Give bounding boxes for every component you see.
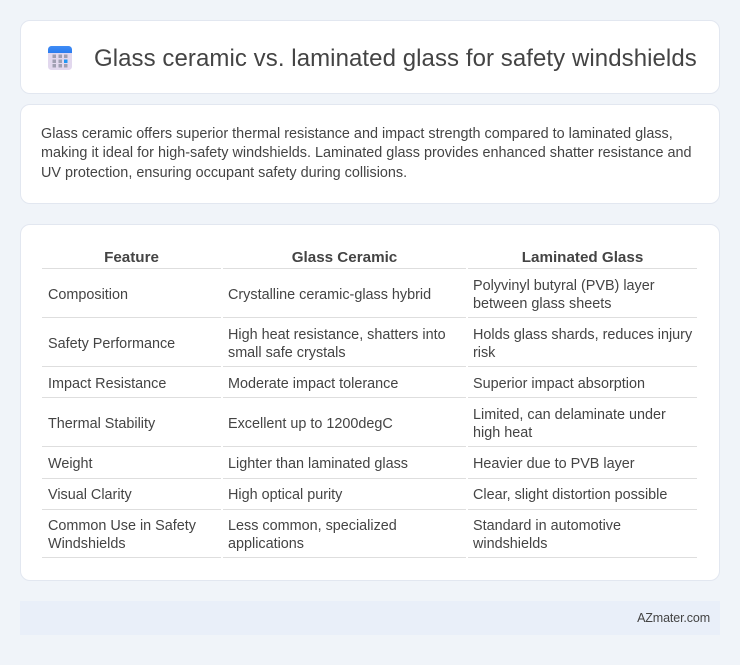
row: impact resistance: Moderate impact tolerance xyxy=(228,376,398,392)
summary text: UV protection, ensuring occupant safety during collisions. xyxy=(41,165,407,181)
row: safety performance: High heat resistance, shatters into xyxy=(228,327,446,343)
row: composition: Crystalline ceramic-glass hybrid xyxy=(228,287,431,303)
column headers: Glass Ceramic xyxy=(292,249,397,266)
summary text: making it ideal for high-safety windshields. Laminated glass provides enhanced shatter resistance and xyxy=(41,145,692,161)
column headers: Laminated Glass xyxy=(522,249,643,266)
title: Glass ceramic vs. laminated glass for safety windshields xyxy=(94,45,697,72)
column headers xyxy=(104,249,643,266)
footer bar xyxy=(20,601,720,635)
row: weight: Heavier due to PVB layer xyxy=(473,456,635,472)
row: common use: applications xyxy=(228,536,304,552)
panel: comparison table xyxy=(20,224,720,581)
row: safety performance xyxy=(48,327,692,361)
row: composition: between glass sheets xyxy=(473,296,611,312)
row: composition: Composition xyxy=(48,287,128,303)
row: thermal stability: Thermal Stability xyxy=(48,416,155,432)
summary text: Glass ceramic offers superior thermal resistance and impact strength compared to laminated glass, xyxy=(41,126,673,142)
column headers: Feature xyxy=(104,249,159,266)
row: weight xyxy=(48,456,635,472)
row: common use: Less common, specialized xyxy=(228,518,397,534)
table rules xyxy=(42,268,697,558)
row: visual clarity: Visual Clarity xyxy=(48,487,132,503)
panel: title card xyxy=(20,20,720,94)
footer credit: AZmater.com xyxy=(637,611,710,625)
row: thermal stability xyxy=(48,407,666,441)
row: visual clarity: Clear, slight distortion possible xyxy=(473,487,667,503)
row: impact resistance xyxy=(48,376,645,392)
row: visual clarity xyxy=(48,487,667,503)
row: safety performance: Safety Performance xyxy=(48,336,175,352)
row: composition xyxy=(48,278,655,312)
row: safety performance: Holds glass shards, reduces injury xyxy=(473,327,692,343)
row: common use: Standard in automotive xyxy=(473,518,621,534)
row: thermal stability: Limited, can delaminate under xyxy=(473,407,666,423)
row: common use: Common Use in Safety xyxy=(48,518,196,534)
row: thermal stability: Excellent up to 1200degC xyxy=(228,416,393,432)
summary text xyxy=(41,126,692,181)
row: composition: Polyvinyl butyral (PVB) layer xyxy=(473,278,655,294)
row: impact resistance: Impact Resistance xyxy=(48,376,166,392)
row: thermal stability: high heat xyxy=(473,425,532,441)
row: safety performance: small safe crystals xyxy=(228,345,346,361)
icon: calendar xyxy=(48,46,72,70)
row: weight: Lighter than laminated glass xyxy=(228,456,408,472)
row: weight: Weight xyxy=(48,456,93,472)
row: impact resistance: Superior impact absorption xyxy=(473,376,645,392)
row: common use: windshields xyxy=(473,536,547,552)
panel: summary card xyxy=(20,104,720,204)
row: common use: Windshields xyxy=(48,536,126,552)
row: common use xyxy=(48,518,621,552)
row: safety performance: risk xyxy=(473,345,495,361)
row: visual clarity: High optical purity xyxy=(228,487,342,503)
